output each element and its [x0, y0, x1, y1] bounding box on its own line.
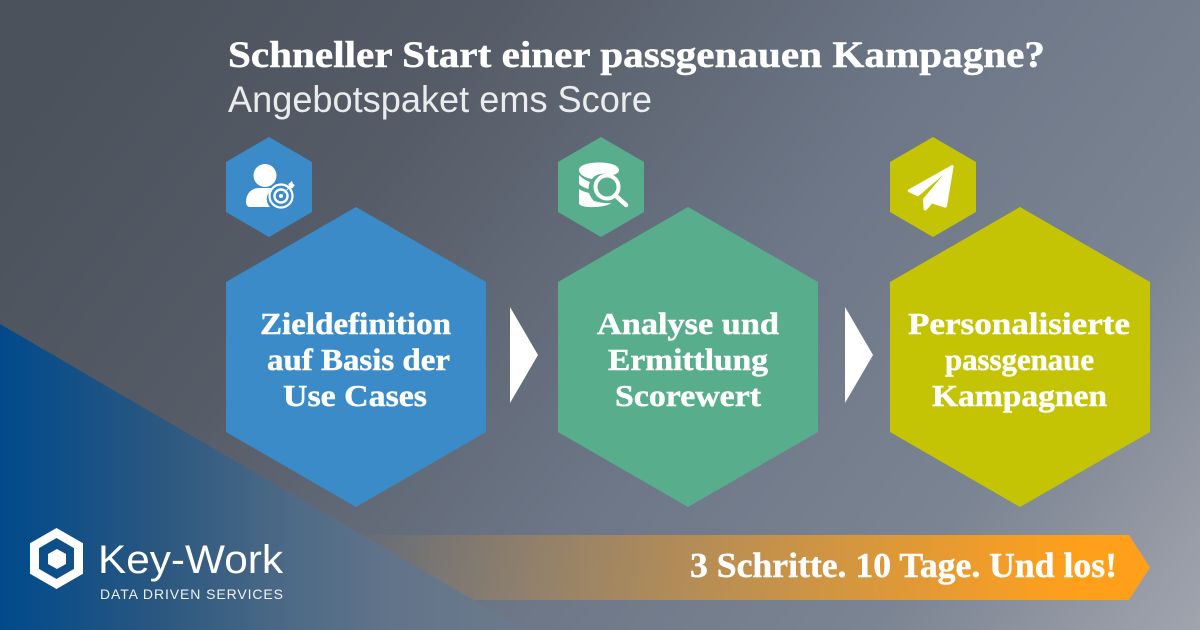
- title: Schneller Start einer passgenauen Kampagne?: [228, 35, 1045, 76]
- large hexagon: Personalisierte: [890, 207, 1150, 507]
- step 2 text: [597, 306, 779, 413]
- step 3 text: Personalisierte: [908, 306, 1130, 341]
- logo hexagon mark: [30, 528, 83, 589]
- step 3: campaigns: [890, 137, 1150, 507]
- logo tagline: DATA DRIVEN SERVICES: [100, 586, 283, 602]
- orange banner arrow: [350, 535, 1150, 600]
- arrow 2: [845, 307, 873, 403]
- step 1 text: [260, 306, 451, 413]
- large hexagon: Analyse: [558, 207, 818, 507]
- step 3 text: [908, 306, 1130, 413]
- icon hexagon: paper plane: [890, 137, 976, 237]
- step 2: analysis: [558, 137, 818, 507]
- step 2 text: Analyse und: [597, 306, 779, 341]
- step 1 text: Zieldefinition: [260, 306, 451, 341]
- logo: Key-Work: [30, 528, 284, 602]
- icon hexagon: database with magnifier: [558, 137, 644, 237]
- large hexagon: Zieldefinition: [226, 207, 486, 507]
- step 2 text: Ermittlung: [608, 342, 769, 377]
- step 2 text: Scorewert: [615, 378, 762, 413]
- step 1 text: auf Basis der: [267, 342, 450, 377]
- arrow 1: [510, 307, 538, 403]
- step 3 text: passgenaue: [945, 342, 1094, 377]
- banner text: 3 Schritte. 10 Tage. Und los!: [690, 546, 1117, 585]
- icon hexagon: user with target: [226, 137, 312, 237]
- step 1: goal definition: [226, 137, 486, 507]
- step 3 text: Kampagnen: [932, 378, 1107, 413]
- blue corner triangle: [0, 324, 525, 630]
- logo wordmark: Key-Work: [98, 538, 284, 582]
- step 1 text: Use Cases: [283, 378, 427, 413]
- subtitle: Angebotspaket ems Score: [228, 79, 652, 120]
